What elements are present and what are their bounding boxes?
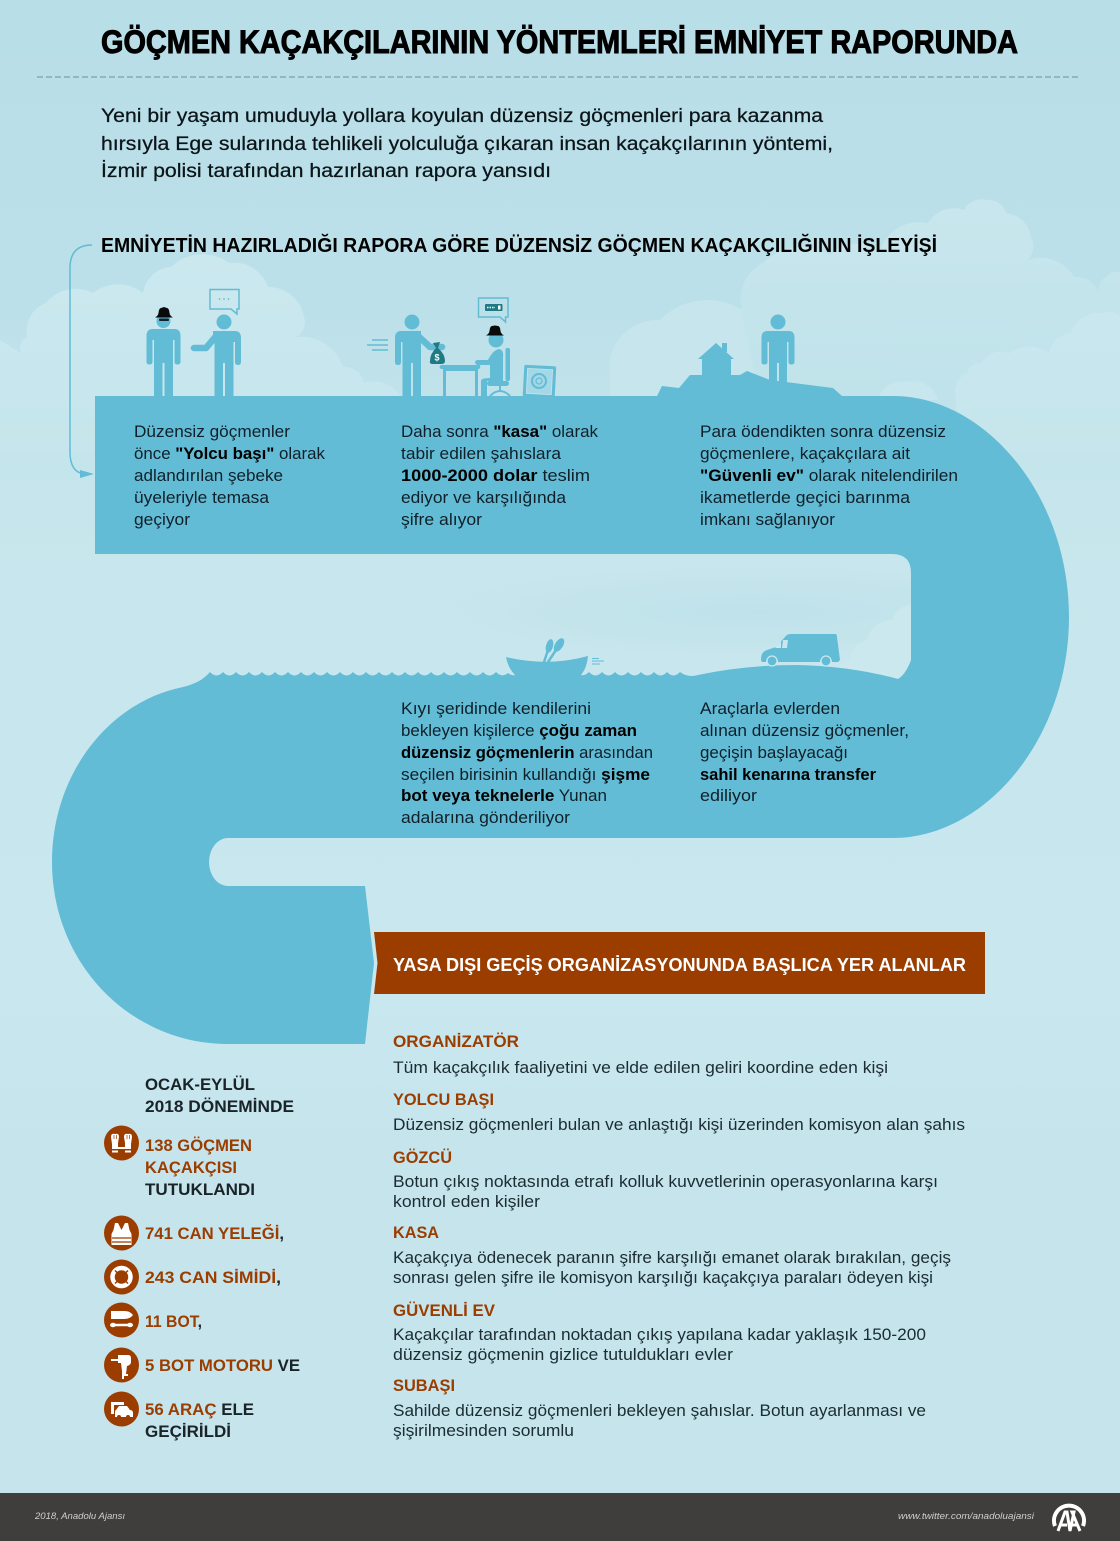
step 5 text: ediliyor (700, 786, 757, 805)
stat: motors (104, 1348, 300, 1382)
stat: vehicles: 56 ARAÇ ELE (145, 1400, 254, 1419)
step 2 text: ediyor ve karşılığında (401, 488, 567, 507)
role: gözcü: kontrol eden kişiler (393, 1193, 541, 1211)
step 5 text (700, 699, 909, 805)
desk (440, 365, 480, 396)
step 2 text (401, 422, 598, 529)
stat: arrests: TUTUKLANDI (145, 1180, 255, 1199)
statistics heading (145, 1075, 294, 1116)
statistics heading: 2018 DÖNEMİNDE (145, 1097, 294, 1116)
step 3 text (700, 422, 958, 529)
icon: handcuffed hands (104, 1126, 139, 1160)
background clouds (0, 199, 1120, 680)
ribbon path (52, 343, 1069, 1044)
role: subaşı: Sahilde düzensiz göçmenleri bekleyen şahıslar. Botun ayarlanması ve (393, 1402, 926, 1420)
icon: wake lines (592, 658, 604, 664)
role: kasa: sonrası gelen şifre ile komisyon karşılığı kaçakçıya paraları ödeyen kişi (393, 1269, 933, 1287)
step 4 text: seçilen birisinin kullandığı şişme (401, 765, 650, 784)
speed lines (367, 340, 388, 350)
roles list (393, 1032, 965, 1440)
icon: boat and oar (104, 1302, 139, 1338)
role: güvenli ev: düzensiz göçmenin gizlice tutuldukları evler (393, 1346, 734, 1364)
icon: AA logo (1054, 1506, 1084, 1531)
role: subaşı: şişirilmesinden sorumlu (393, 1422, 574, 1440)
stat: arrests: 138 GÖÇMEN (145, 1136, 252, 1155)
step 1 text (134, 422, 325, 529)
stat: motors: 5 BOT MOTORU VE (145, 1356, 300, 1375)
icon: boat oars (544, 637, 566, 662)
role: organizatör (393, 1032, 888, 1077)
intro paragraph: Yeni bir yaşam umuduyla yollara koyulan düzensiz göçmenleri para kazanma (101, 105, 823, 127)
person with hat (146, 307, 180, 396)
money bag (430, 342, 445, 364)
role: gözcü (393, 1148, 938, 1211)
icon: person by safe house (762, 314, 794, 383)
icon: life vest (104, 1216, 139, 1250)
role: organizatör: Tüm kaçakçılık faaliyetini ve elde edilen geliri koordine eden kişi (393, 1059, 888, 1077)
role: subaşı: SUBAŞI (393, 1376, 455, 1395)
stat: life vests (104, 1216, 284, 1250)
step 5 text: sahil kenarına transfer (700, 765, 876, 784)
stat: life rings: 243 CAN SİMİDİ , (145, 1268, 281, 1287)
stat: boats (104, 1302, 202, 1338)
footer (0, 1493, 1120, 1541)
banner: YASA DIŞI GEÇİŞ ORGANİZASYONUNDA BAŞLICA YER ALANLAR (393, 954, 966, 975)
speech bubble (210, 290, 239, 314)
stat: life vests: 741 CAN YELEĞİ, (145, 1224, 284, 1243)
step 4 text: Kıyı şeridinde kendilerini (401, 699, 591, 718)
title: GÖÇMEN KAÇAKÇILARININ YÖNTEMLERİ EMNİYET RAPORUNDA (101, 24, 1018, 60)
role: kasa: Kaçakçıya ödenecek paranın şifre karşılığı emanet olarak bırakılan, geçiş (393, 1249, 951, 1267)
step 2 text: şifre alıyor (401, 510, 482, 529)
stat: vehicles (104, 1392, 254, 1441)
step 2 text: 1000-2000 dolar teslim (401, 466, 590, 485)
stat: boats: 11 BOT, (145, 1312, 202, 1331)
icon: bus and car (104, 1392, 139, 1426)
person paying (395, 314, 442, 396)
arrow: loop into ribbon (70, 245, 94, 478)
statistics heading: OCAK-EYLÜL (145, 1075, 255, 1094)
dashed divider (37, 76, 1080, 78)
role: gözcü: Botun çıkış noktasında etrafı kolluk kuvvetlerinin operasyonlarına karşı (393, 1173, 938, 1191)
step 4 text: düzensiz göçmenlerin arasından (401, 743, 653, 762)
icon: payment at desk (367, 298, 556, 398)
role: kasa: KASA (393, 1223, 439, 1242)
step 1 text: önce "Yolcu başı" olarak (134, 444, 325, 463)
role: güvenli ev (393, 1301, 926, 1364)
step 1 text: Düzensiz göçmenler (134, 422, 290, 441)
step 2 text: tabir edilen şahıslara (401, 444, 562, 463)
step 3 text: "Güvenli ev" olarak nitelendirilen (700, 466, 958, 485)
icon: hat man and contact (146, 290, 241, 396)
role: yolcu başı: YOLCU BAŞI (393, 1090, 494, 1109)
stat: life rings (104, 1260, 281, 1294)
section heading: EMNİYETİN HAZIRLADIĞI RAPORA GÖRE DÜZENSİZ GÖÇMEN KAÇAKÇILIĞININ İŞLEYİŞİ (101, 233, 937, 257)
stat: arrests: KAÇAKÇISI (145, 1158, 237, 1177)
step 4 text (401, 699, 653, 827)
intro paragraph: hırsıyla Ege sularında tehlikeli yolculuğa çıkaran insan kaçakçılarının yöntemi, (101, 133, 833, 155)
step 3 text: Para ödendikten sonra düzensiz (700, 422, 946, 441)
role: güvenli ev: Kaçakçılar tarafından noktadan çıkış yapılana kadar yaklaşık 150-200 (393, 1326, 926, 1344)
step 4 text: bekleyen kişilerce çoğu zaman (401, 721, 637, 740)
stat: arrests (104, 1126, 255, 1199)
icon: outboard motor (104, 1348, 139, 1382)
step 4 text: bot veya teknelerle Yunan (401, 786, 607, 805)
step 5 text: Araçlarla evlerden (700, 699, 840, 718)
icon: life ring (104, 1260, 139, 1294)
role: gözcü: GÖZCÜ (393, 1148, 452, 1167)
safe (523, 365, 556, 398)
intro paragraph: İzmir polisi tarafından hazırlanan rapora yansıdı (101, 159, 551, 182)
person contact (194, 314, 241, 396)
step 3 text: göçmenlere, kaçakçılara ait (700, 444, 910, 463)
role: subaşı (393, 1376, 926, 1440)
banner (374, 932, 985, 994)
step 5 text: geçişin başlayacağı (700, 743, 848, 762)
footer credit: 2018, Anadolu Ajansı (34, 1511, 125, 1522)
role: yolcu başı (393, 1090, 965, 1134)
icon: van (761, 634, 840, 666)
seated man (475, 326, 510, 396)
footer url: www.twitter.com/anadoluajansi (898, 1511, 1035, 1522)
icon: chimney (722, 343, 727, 352)
speech bubble with code (478, 298, 508, 322)
role: kasa (393, 1223, 951, 1287)
step 3 text: ikametlerde geçici barınma (700, 488, 911, 507)
step 1 text: geçiyor (134, 510, 190, 529)
role: organizatör: ORGANİZATÖR (393, 1032, 519, 1051)
step 2 text: Daha sonra "kasa" olarak (401, 422, 598, 441)
step 4 text: adalarına gönderiliyor (401, 808, 570, 827)
intro paragraph (101, 105, 833, 182)
role: güvenli ev: GÜVENLİ EV (393, 1301, 496, 1320)
step 5 text: alınan düzensiz göçmenler, (700, 721, 909, 740)
step 1 text: üyeleriyle temasa (134, 488, 270, 507)
step 1 text: adlandırılan şebeke (134, 466, 283, 485)
money bag: $ (434, 352, 440, 362)
role: yolcu başı: Düzensiz göçmenleri bulan ve anlaştığı kişi üzerinden komisyon alan şahıs (393, 1116, 965, 1134)
step 3 text: imkanı sağlanıyor (700, 510, 835, 529)
stat: vehicles: GEÇİRİLDİ (145, 1422, 231, 1441)
